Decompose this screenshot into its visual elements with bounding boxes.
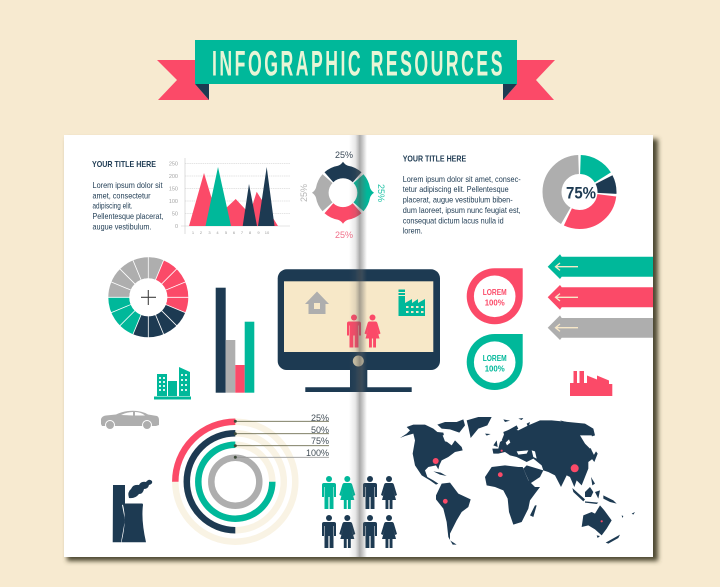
teal woman	[339, 476, 355, 509]
y axis labels: 0	[175, 224, 178, 230]
arrow: red	[548, 285, 653, 310]
teal bar	[245, 322, 254, 393]
ring label top: 25%	[335, 150, 353, 160]
monitor body	[278, 269, 440, 370]
left segment	[312, 174, 332, 211]
teal arc	[198, 445, 272, 519]
dark man bottom right	[363, 515, 377, 548]
gray ring	[211, 458, 259, 506]
right paragraph: placerat, augue vestibulum biben-	[403, 194, 513, 204]
wheel separators	[90, 239, 206, 355]
world map	[400, 417, 635, 545]
ring label right: 25%	[376, 184, 386, 202]
teal badge text	[483, 354, 507, 374]
map: americas and greenland	[400, 417, 510, 545]
teal badge text: LOREM	[483, 354, 507, 363]
dark bar	[216, 288, 226, 393]
left paragraph	[92, 180, 164, 231]
cooling tower	[122, 504, 146, 542]
monitor button	[353, 356, 364, 366]
icon: power plant	[113, 480, 152, 542]
x axis labels: 9	[257, 230, 260, 235]
teal drop center	[474, 341, 516, 383]
red drop	[467, 268, 523, 324]
monitor	[278, 269, 440, 392]
right paragraph: lorem.	[403, 226, 423, 236]
red bar	[235, 365, 245, 393]
text block: right title and paragraph	[403, 154, 521, 236]
teal man	[322, 476, 336, 509]
wheel segments	[119, 268, 178, 327]
y axis labels	[169, 162, 178, 230]
right heading: YOUR TITLE HERE	[403, 154, 466, 164]
right paragraph: consequat dictum lacus nulla id	[403, 216, 504, 226]
title banner	[157, 40, 555, 100]
right segment	[354, 174, 374, 211]
book spine shading	[349, 135, 367, 557]
book page shadow	[67, 139, 658, 561]
concentric progress rings	[175, 422, 295, 542]
ribbon left tail	[157, 60, 209, 100]
arrow: gray	[548, 315, 653, 340]
icon: car	[101, 411, 159, 430]
map dots	[433, 450, 603, 522]
chart grid	[181, 158, 290, 234]
x axis labels	[192, 230, 270, 235]
ribbon right fold	[503, 84, 517, 100]
city windows	[159, 374, 187, 391]
x axis labels: 4	[216, 230, 219, 235]
teal badge text: 100%	[485, 364, 505, 374]
donut value: 75%	[566, 184, 596, 202]
icon: man	[347, 314, 361, 348]
left heading: YOUR TITLE HERE	[92, 159, 156, 169]
red peaks	[189, 173, 278, 226]
left paragraph: Lorem ipsum dolor sit	[92, 180, 163, 190]
teal drop	[467, 334, 523, 390]
icon: factory	[398, 290, 425, 316]
book page	[64, 135, 653, 557]
ribbon right tail	[503, 60, 555, 100]
teal peak	[206, 167, 231, 226]
map: eurasia, africa and oceania	[485, 418, 635, 544]
people grid	[322, 476, 397, 548]
x axis labels: 7	[241, 230, 244, 235]
x axis labels: 2	[200, 230, 203, 235]
legend labels: 75%	[311, 436, 329, 446]
wheel hub	[129, 278, 167, 316]
left paragraph: Pellentesque placerat,	[92, 211, 164, 221]
smoke	[128, 480, 152, 498]
legend labels: 50%	[311, 425, 329, 435]
x axis labels: 8	[249, 230, 252, 235]
area chart	[169, 158, 290, 235]
monitor screen	[284, 281, 433, 352]
red badge text: 100%	[485, 298, 505, 308]
dark woman bottom right	[381, 515, 397, 548]
plus icon	[141, 290, 156, 305]
donut chart 75%	[552, 164, 607, 220]
x axis labels: 5	[225, 230, 228, 235]
badge: red	[467, 268, 523, 324]
right paragraph: Lorem ipsum dolor sit amet, consec-	[403, 174, 521, 184]
monitor stand	[305, 368, 412, 392]
left paragraph: augue vestibulum.	[92, 221, 152, 231]
ring label bottom: 25%	[335, 230, 353, 240]
gray bar	[226, 340, 235, 393]
left paragraph: amet, consectetur	[92, 190, 151, 200]
x axis labels: 10	[265, 230, 270, 235]
ribbon left fold	[195, 84, 209, 100]
segmented wheel	[90, 239, 206, 355]
y axis labels: 250	[169, 162, 178, 168]
icon: house	[305, 292, 329, 314]
donut segments	[552, 164, 607, 220]
right paragraph	[403, 174, 521, 236]
top segment	[324, 162, 362, 182]
legend labels	[306, 413, 329, 458]
dark woman bottom left	[339, 515, 355, 548]
badge: teal	[467, 334, 523, 390]
y axis labels: 150	[169, 186, 178, 192]
leader lines	[235, 421, 329, 457]
left paragraph: adipiscing elit.	[92, 201, 132, 211]
y axis labels: 200	[169, 174, 178, 180]
dark man top	[363, 476, 377, 509]
legend labels: 100%	[306, 448, 329, 458]
x axis labels: 3	[208, 230, 211, 235]
ring of four segments	[299, 150, 386, 240]
legend labels: 25%	[311, 413, 329, 423]
x axis labels: 6	[233, 230, 236, 235]
y axis labels: 50	[172, 212, 178, 218]
arrow: teal	[548, 254, 653, 279]
banner bar	[195, 40, 517, 84]
right paragraph: dum laoreet, ipsum nunc feugiat est,	[403, 205, 521, 215]
red badge text: LOREM	[483, 288, 507, 297]
cream track rings	[175, 422, 295, 542]
factory windows	[406, 306, 424, 313]
icon: woman	[364, 314, 380, 348]
red badge text	[483, 288, 507, 308]
ring label left: 25%	[299, 184, 309, 202]
leader dots	[234, 420, 237, 459]
ring legend	[234, 413, 329, 459]
red arc	[175, 422, 235, 482]
text block: left title and paragraph	[92, 159, 164, 231]
y axis labels: 100	[169, 199, 178, 205]
bottom segment	[324, 203, 362, 224]
icon: red factory	[570, 371, 612, 396]
right paragraph: tetur adipiscing elit. Pellentesque	[403, 184, 509, 194]
dark woman top	[381, 476, 397, 509]
red drop center	[474, 276, 516, 317]
x axis labels: 1	[192, 230, 195, 235]
icon: teal city	[154, 367, 191, 400]
dark man bottom left	[322, 515, 336, 548]
chimney	[113, 485, 125, 542]
dark peaks	[243, 167, 274, 226]
dark arc	[187, 433, 235, 530]
bar chart	[216, 288, 254, 393]
